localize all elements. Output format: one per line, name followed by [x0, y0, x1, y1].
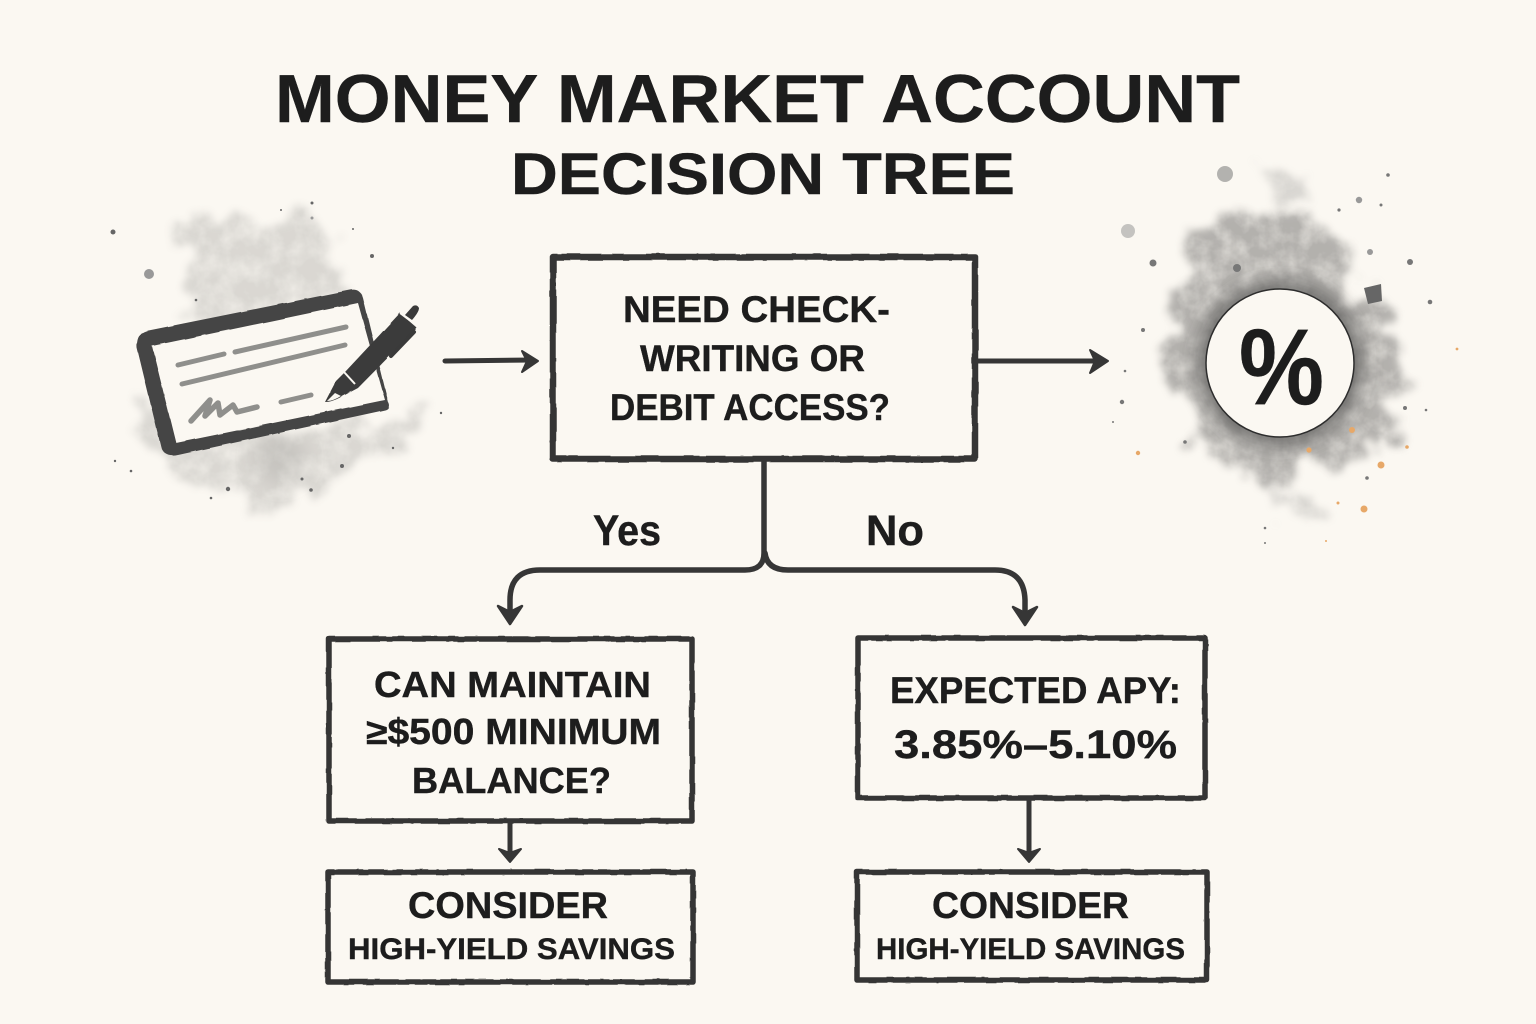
- box: consider high-yield savings left: CONSIDER: [408, 885, 608, 926]
- box: minimum balance question: BALANCE?: [412, 760, 611, 801]
- box: consider high-yield savings left: HIGH-YIELD SAVINGS: [348, 933, 675, 966]
- box: consider high-yield savings left: [328, 872, 693, 982]
- box: minimum balance question: [329, 639, 692, 821]
- icon: check and pen with ink wash: [110, 202, 442, 510]
- box: expected apy: 3.85%–5.10%: [894, 723, 1177, 767]
- check: [137, 290, 389, 456]
- box: expected apy: EXPECTED APY:: [890, 670, 1181, 711]
- title: DECISION TREE: [511, 142, 1015, 207]
- box: check-writing question: NEED CHECK-: [623, 289, 890, 330]
- icon: percent with ink wash: [1112, 165, 1458, 544]
- ink wash behind check: [125, 215, 410, 510]
- arrowhead: yes: [498, 606, 522, 624]
- branch connector: [498, 461, 1037, 625]
- box: minimum balance question: ≥$500 MINIMUM: [366, 711, 661, 752]
- arrow: question to percent: [978, 350, 1108, 373]
- label: yes: Yes: [593, 507, 661, 555]
- box: consider high-yield savings right: HIGH-YIELD SAVINGS: [876, 933, 1185, 966]
- box: check-writing question: DEBIT ACCESS?: [610, 387, 890, 428]
- arrow: balance to consider: [499, 823, 521, 862]
- label: no: No: [866, 507, 924, 555]
- arrow: check to question: [445, 351, 538, 372]
- speckles: [110, 202, 442, 499]
- title: MONEY MARKET ACCOUNT: [275, 61, 1240, 137]
- percent badge: [1206, 289, 1354, 437]
- box: consider high-yield savings right: CONSIDER: [932, 885, 1129, 926]
- box: minimum balance question: CAN MAINTAIN: [374, 664, 651, 705]
- box: expected apy: [858, 638, 1205, 798]
- title: [275, 61, 1240, 207]
- ink wash behind percent: [1121, 165, 1405, 510]
- percent badge: %: [1239, 306, 1324, 427]
- arrow: apy to consider: [1018, 800, 1040, 862]
- orange speckles: [1136, 348, 1458, 542]
- box: check-writing question: WRITING OR: [640, 338, 865, 379]
- pen: [325, 305, 419, 402]
- box: consider high-yield savings right: [857, 872, 1207, 980]
- arrowhead: no: [1013, 607, 1037, 625]
- box: check-writing question: [553, 257, 975, 459]
- speckles: [1112, 173, 1432, 544]
